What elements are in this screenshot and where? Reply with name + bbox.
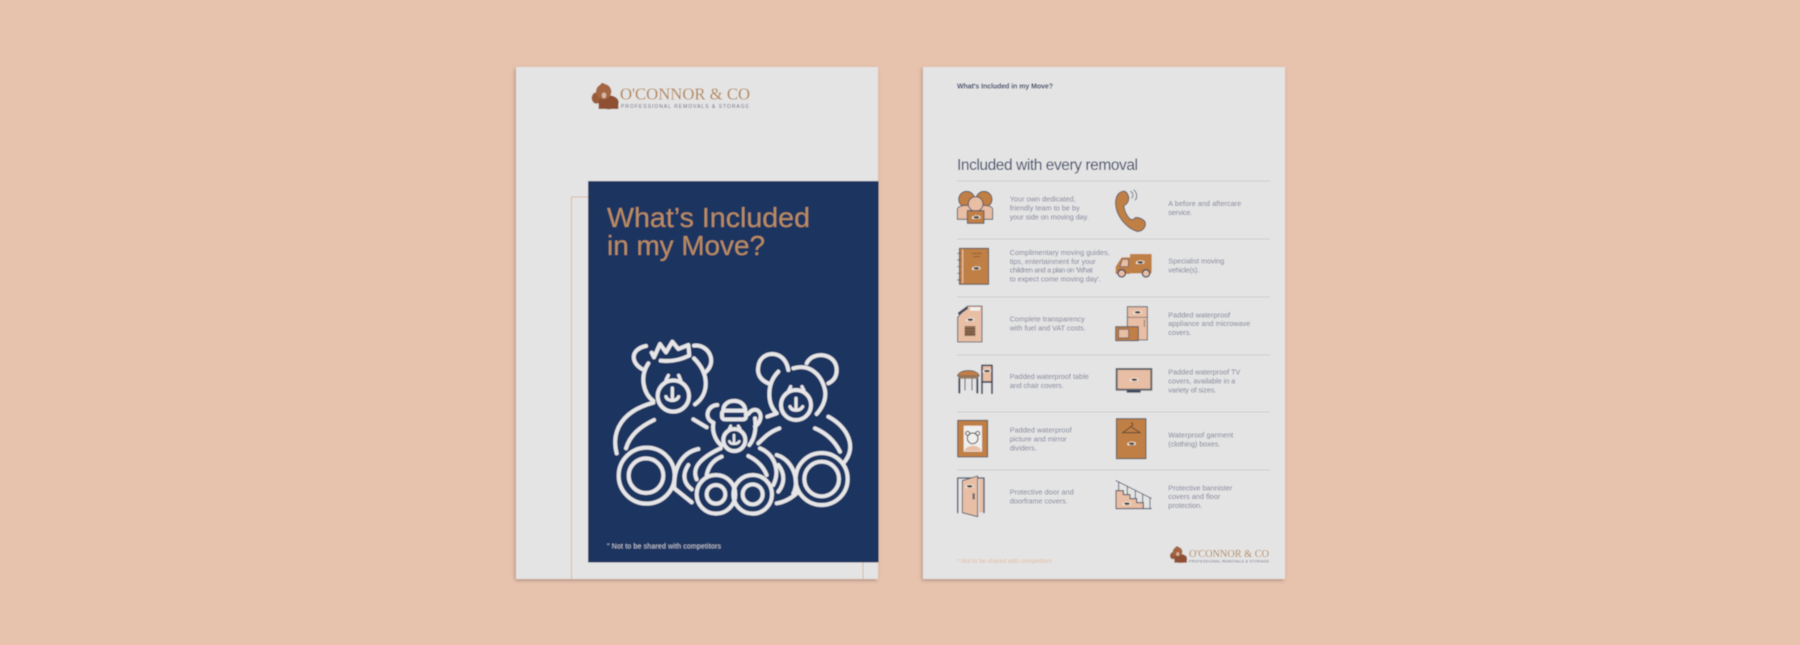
item: team (957, 191, 1089, 223)
text: Your own dedicated, (1010, 194, 1076, 203)
icon: fridge and microwave (1116, 307, 1147, 341)
item: picture dividers (958, 420, 1072, 457)
right bear (758, 354, 850, 505)
text: friendly team to be by (1010, 203, 1080, 212)
text: protection. (1168, 501, 1202, 510)
logo tagline: PROFESSIONAL REMOVALS & STORAGE (621, 104, 750, 110)
text: tips, entertainment for your (1010, 257, 1096, 266)
list sheet (923, 67, 1285, 579)
item: guides (957, 248, 1110, 284)
text: covers and floor (1168, 492, 1221, 501)
item: appliances (1116, 307, 1250, 341)
running header: What's Included in my Move? (957, 84, 1053, 90)
title: What’s Included (607, 202, 810, 233)
text: doorframe covers. (1010, 496, 1068, 506)
text: Padded waterproof table (1010, 372, 1089, 381)
item: bannister covers (1116, 481, 1233, 510)
logo tagline: PROFESSIONAL REMOVALS & STORAGE (1189, 560, 1270, 564)
item: tv covers (1117, 368, 1241, 394)
icon: teddy bear family (615, 342, 850, 514)
icon: tv (1117, 369, 1151, 393)
logo (1170, 546, 1270, 564)
text: vehicle(s). (1168, 266, 1199, 275)
big bear (615, 342, 711, 504)
text: Protective bannister (1168, 483, 1233, 492)
title: in my Move? (607, 230, 765, 261)
text: Padded waterproof (1010, 426, 1072, 435)
text: and chair covers. (1010, 381, 1064, 390)
text: children and a plan on 'What (1010, 266, 1093, 274)
small bear (695, 401, 776, 514)
logo name: O'CONNOR & CO (1189, 549, 1269, 560)
cover sheet (516, 67, 878, 579)
logo bear (592, 83, 619, 109)
heading: Included with every removal (957, 157, 1138, 174)
logo bear (1170, 546, 1187, 563)
panel: included list page (923, 67, 1285, 579)
text: your side on moving day. (1010, 212, 1089, 221)
text: Padded waterproof (1168, 310, 1230, 319)
text: Protective door and (1010, 488, 1074, 497)
icon: fuel can (958, 306, 982, 342)
navy panel (588, 182, 878, 562)
item: aftercare (1116, 190, 1241, 231)
icon: garment box (1116, 419, 1146, 459)
text: to expect come moving day'. (1010, 274, 1101, 283)
text: Waterproof garment (1168, 430, 1233, 439)
text: covers. (1168, 328, 1191, 337)
icon: phone (1116, 190, 1145, 231)
icon: picture frame (958, 420, 988, 457)
text: Padded waterproof TV (1168, 368, 1241, 377)
text: (clothing) boxes. (1168, 439, 1220, 448)
text: service. (1168, 208, 1192, 217)
footnote: " Not to be shared with competitors (607, 544, 722, 550)
icon: stairs (1116, 481, 1151, 509)
icon: notebook (957, 248, 989, 284)
item: vehicles (1116, 254, 1224, 277)
text: Complimentary moving guides, (1010, 248, 1110, 257)
item: fuel (958, 306, 1086, 342)
text: A before and aftercare (1168, 199, 1241, 208)
text: picture and mirror (1010, 434, 1067, 444)
footnote: * Not to be shared with competitors (957, 559, 1052, 565)
text: variety of sizes. (1168, 386, 1216, 394)
icon: team (957, 191, 993, 223)
text: with fuel and VAT costs. (1009, 324, 1086, 333)
item: table covers (957, 365, 1089, 393)
panel: cover page (516, 67, 878, 579)
text: dividers. (1010, 444, 1037, 452)
icon: van (1116, 254, 1152, 277)
text: covers, available in a (1168, 377, 1235, 386)
outline accent (572, 197, 863, 579)
logo name: O'CONNOR & CO (620, 84, 750, 104)
text: Complete transparency (1010, 315, 1085, 324)
item: door covers (958, 476, 1074, 517)
logo (592, 83, 750, 110)
text: appliance and microwave (1168, 319, 1250, 328)
icon: door (958, 476, 984, 517)
text: Specialist moving (1168, 257, 1224, 266)
icon: table and chair (957, 365, 992, 393)
item: garment boxes (1116, 419, 1233, 459)
